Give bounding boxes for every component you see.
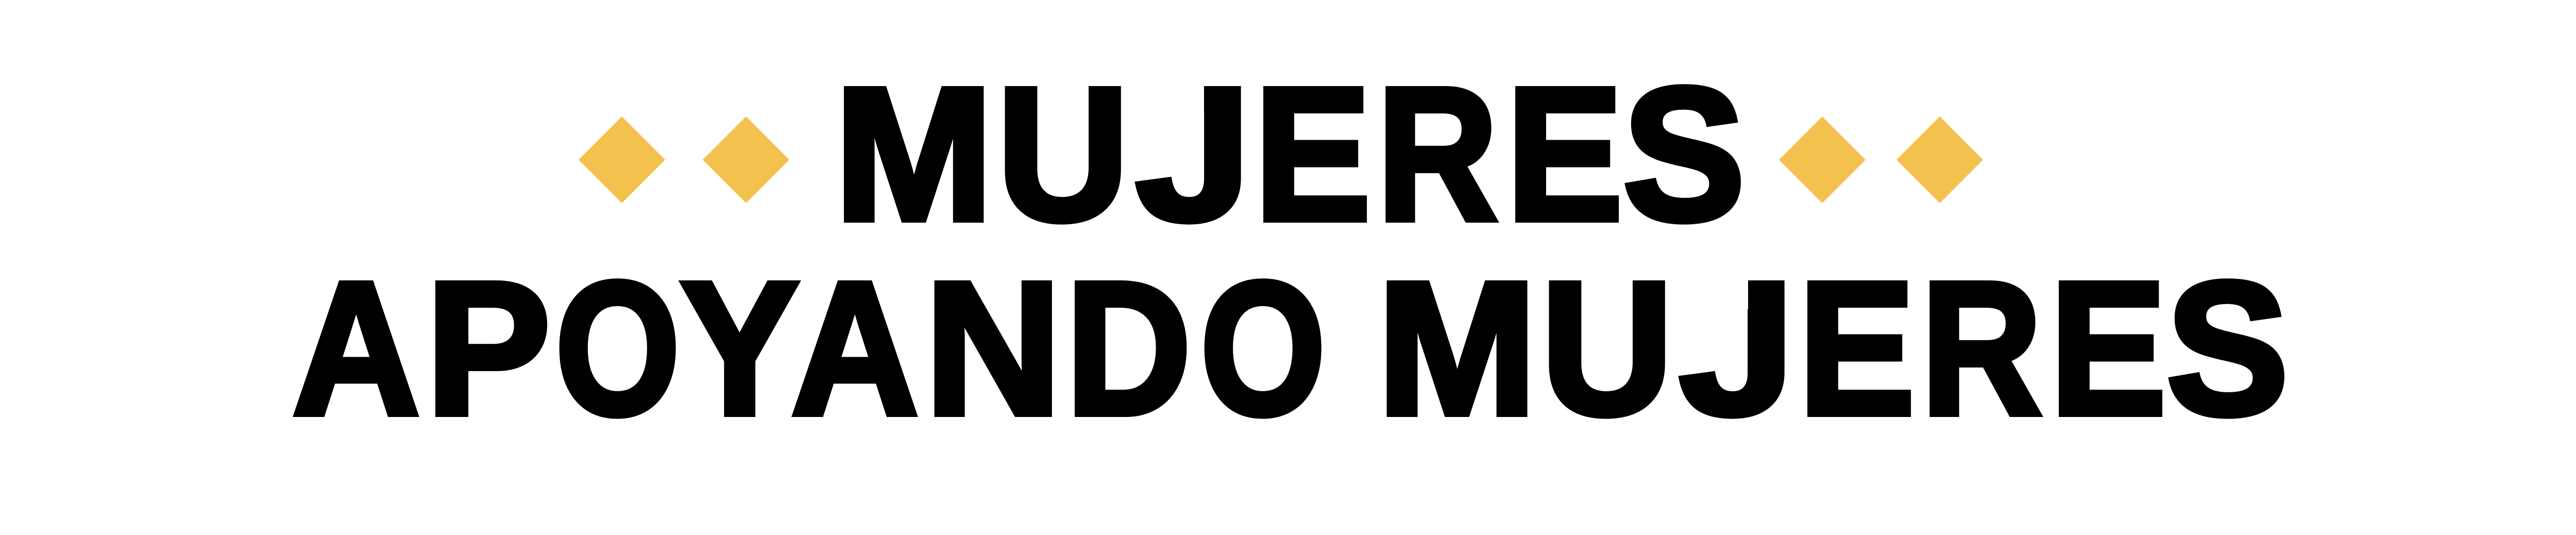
title line 2: APOYANDO MUJERES: A [791,242,919,454]
title line 1: MUJERES: R [1377,48,1498,260]
title line 2: APOYANDO MUJERES: E [1799,242,1915,454]
title line 1: MUJERES: S [1623,48,1745,260]
title line 1: MUJERES: U [997,48,1129,260]
title line 2: APOYANDO MUJERES: E [2050,242,2166,454]
title line 2: APOYANDO MUJERES: N [925,242,1062,454]
title line 1: MUJERES: E [1506,48,1623,260]
title line 2: APOYANDO MUJERES: A [293,242,420,454]
title line 2: APOYANDO MUJERES: D [1066,242,1191,454]
title line 2: APOYANDO MUJERES: O [1200,242,1326,454]
title line 1: MUJERES: E [1255,48,1371,260]
icon: left diamond pair [579,116,789,203]
title line 2: APOYANDO MUJERES: Y [681,242,799,454]
title line 2: APOYANDO MUJERES: J [1679,242,1795,454]
title line 2: APOYANDO MUJERES: S [2166,242,2289,454]
title line 1: MUJERES: J [1136,48,1252,260]
title line 2: APOYANDO MUJERES: M [1377,242,1537,454]
title line 1: MUJERES: M [834,48,993,260]
icon: right diamond pair [1779,116,1983,203]
title line 2: APOYANDO MUJERES: R [1921,242,2042,454]
title line 2: APOYANDO MUJERES: O [555,242,680,454]
title line 2: APOYANDO MUJERES: P [426,242,551,454]
title line 2: APOYANDO MUJERES: U [1541,242,1673,454]
